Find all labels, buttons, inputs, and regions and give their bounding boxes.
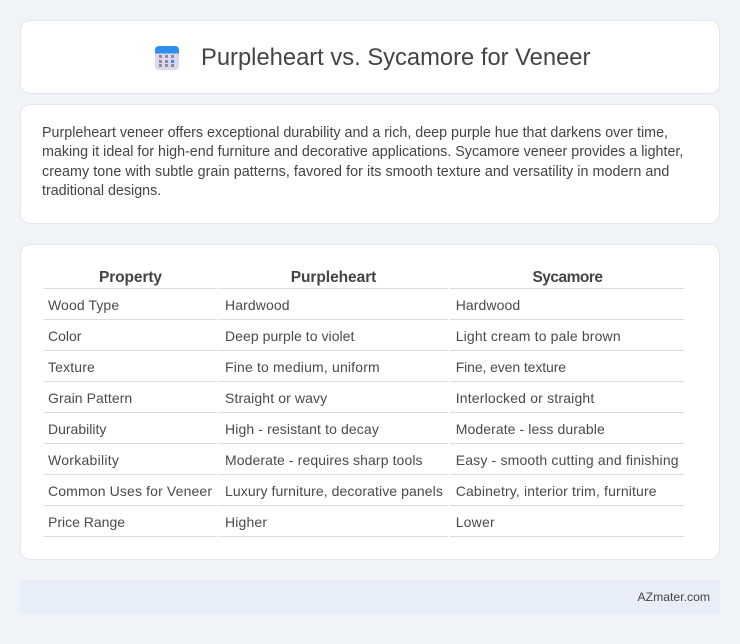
table rows: Moderate - requires sharp tools: [225, 452, 423, 468]
title: Purpleheart vs. Sycamore for Veneer: [201, 44, 590, 71]
table rows: Easy - smooth cutting and finishing: [456, 452, 679, 468]
table header: Property: [99, 269, 162, 286]
footer bar: [20, 580, 720, 614]
table rows: Straight or wavy: [225, 390, 327, 406]
description text: traditional designs.: [42, 183, 161, 199]
table rows: Texture: [48, 359, 95, 375]
table header: Purpleheart: [291, 269, 376, 286]
table rows: Hardwood: [225, 297, 290, 313]
table rows: Light cream to pale brown: [456, 328, 621, 344]
table rows: Lower: [456, 514, 495, 530]
table rows: Color: [48, 328, 81, 344]
description text: making it ideal for high-end furniture and decorative applications. Sycamore veneer provides a lighter,: [42, 144, 683, 160]
description text: Purpleheart veneer offers exceptional durability and a rich, deep purple hue that darkens over time,: [42, 125, 668, 141]
table rows: Durability: [48, 421, 106, 437]
table header: [99, 269, 603, 286]
table rows: Fine to medium, uniform: [225, 359, 380, 375]
table rows: Luxury furniture, decorative panels: [225, 483, 443, 499]
table rows: Interlocked or straight: [456, 390, 594, 406]
table rows: High - resistant to decay: [225, 421, 379, 437]
table rows: Common Uses for Veneer: [48, 483, 212, 499]
table rows: Price Range: [48, 514, 125, 530]
footer credit: AZmater.com: [638, 590, 710, 604]
table rows: Grain Pattern: [48, 390, 132, 406]
table rows: Hardwood: [456, 297, 520, 313]
description text: [42, 125, 683, 199]
table rows: Wood Type: [48, 297, 119, 313]
table rows: Workability: [48, 452, 119, 468]
icon: calendar: [155, 46, 179, 70]
panel: title card: [20, 20, 720, 94]
panel: description card: [20, 104, 720, 224]
panel: comparison table card: [20, 244, 720, 560]
description text: creamy tone with subtle grain patterns, favored for its smooth texture and versatility in modern and: [42, 164, 669, 180]
table rows: Cabinetry, interior trim, furniture: [456, 483, 657, 499]
table rows: Moderate - less durable: [456, 421, 605, 437]
table rows: Fine, even texture: [456, 359, 566, 375]
table header: Sycamore: [532, 269, 603, 286]
table rows: Higher: [225, 514, 267, 530]
table rows: Deep purple to violet: [225, 328, 354, 344]
table rows: [43, 288, 684, 537]
